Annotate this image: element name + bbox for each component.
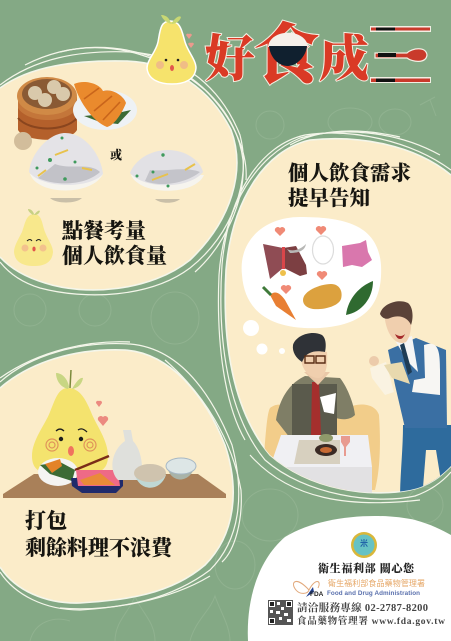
text: dietary needs: 個人飲食需求 [288, 161, 411, 185]
panel: order by appetite [0, 47, 246, 295]
icon: title pear mascot [147, 15, 196, 84]
panel: take leftovers [0, 342, 241, 610]
text: hotline and website [297, 601, 445, 627]
text: dietary needs [288, 161, 411, 210]
icon: small rice bowl [130, 150, 204, 203]
text: FDA name [327, 578, 425, 597]
illustration: table [3, 474, 226, 498]
panel: dietary needs [218, 131, 451, 503]
icons: hearts [275, 226, 327, 294]
illustration: dining scene [262, 301, 451, 500]
panel: footer contact [248, 516, 451, 641]
icon: beef cow [263, 244, 307, 279]
icon: takeaway box [71, 470, 123, 493]
icon: soup bowls [134, 458, 196, 488]
text: FDA name: Food and Drug Administration [327, 590, 420, 597]
icon: bottom chopstick [370, 77, 431, 83]
icon: ministry emblem [351, 532, 377, 558]
icon: ministry emblem: 米 [360, 538, 368, 548]
text: FDA name: 衛生福利部食品藥物管理署 [328, 578, 425, 588]
icon: QR code [268, 600, 293, 625]
icon: leftover plate [38, 456, 109, 486]
icon: rice bowl [268, 33, 308, 66]
illustration: waiter [369, 301, 451, 500]
text: take leftovers: 打包 [25, 509, 67, 533]
icon: pig [342, 240, 372, 267]
icon: large rice bowl [29, 133, 103, 202]
illustration: armchair [262, 405, 380, 490]
text: hotline and website: 請洽服務專線 02-2787-8200 [297, 601, 428, 614]
text: order by appetite: 點餐考量 [61, 219, 146, 243]
icon: pale pear mascot [14, 209, 53, 266]
title [205, 20, 431, 93]
icon: top chopstick [370, 26, 431, 32]
icon: FDA logo [294, 581, 324, 598]
icon: steamer with dumplings [14, 77, 77, 150]
icon: FDA logo: FDA [310, 591, 324, 598]
icon: plate of fried dumplings [73, 82, 137, 130]
illustration: seated customer [276, 333, 355, 440]
text: order by appetite: 個人飲食量 [62, 244, 167, 268]
title: 好 [205, 31, 255, 87]
text: take leftovers: 剩餘料理不浪費 [25, 536, 176, 560]
label: or: 或 [110, 147, 122, 162]
text: hotline and website: 食品藥物管理署 www.fda.gov.tw [297, 615, 445, 627]
text: dietary needs: 提早告知 [288, 186, 370, 210]
icon: spoon [375, 49, 427, 61]
icon: pea pod [346, 281, 373, 315]
illustration: table with meal [273, 434, 372, 492]
icon: large pear mascot [32, 370, 108, 476]
icon: carrot [263, 287, 296, 320]
text: take leftovers [25, 509, 176, 560]
icon: egg [312, 236, 334, 264]
title: 食 [254, 20, 321, 93]
thought bubble [242, 217, 381, 354]
title: 成 [319, 31, 369, 87]
text: ministry cares: 衛生福利部 關心您 [318, 561, 415, 575]
icon: plastic bag [112, 430, 142, 480]
text: order by appetite [61, 219, 167, 268]
icon: potato [303, 284, 342, 309]
